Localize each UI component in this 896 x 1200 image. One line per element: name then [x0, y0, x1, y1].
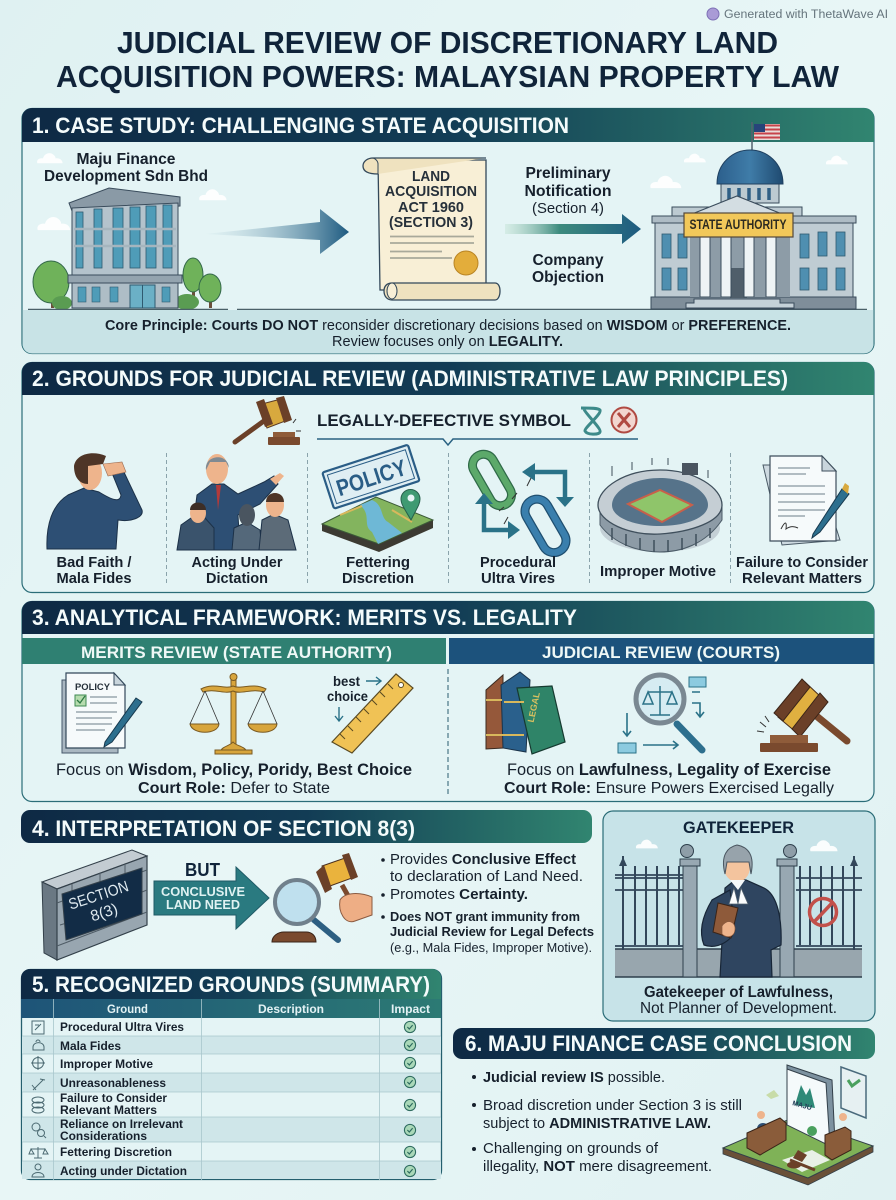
- label: failure to consider: Failure to Consider: [736, 554, 868, 571]
- illustration: judge at the gates: [615, 844, 862, 977]
- label: fettering discretion: Fettering: [346, 554, 410, 571]
- table row shading: [22, 1036, 441, 1179]
- subheader: merits review: [22, 638, 446, 664]
- heading: section 3: [22, 601, 874, 634]
- icon: gavel: [235, 396, 301, 445]
- table ground names: Considerations: [60, 1129, 147, 1143]
- title: [56, 26, 839, 94]
- panel: 2 grounds for judicial review: [22, 362, 874, 592]
- table ground names: Reliance on Irrelevant: [60, 1117, 183, 1131]
- label: fettering discretion: [342, 554, 414, 587]
- ground lines: [28, 308, 867, 310]
- panel: 4 interpretation of section 8(3): [21, 810, 594, 960]
- table header: Impact: [391, 1002, 430, 1016]
- icon: documents and pen: [763, 456, 849, 545]
- subheader: judicial review: [449, 638, 874, 664]
- table ground names: Relevant Matters: [60, 1103, 157, 1117]
- icon: acting under dictation: [177, 454, 296, 550]
- illustration: courtroom and Maju book: MAJU: [791, 1100, 812, 1112]
- legally-defective symbol label: LEGALLY-DEFECTIVE SYMBOL: [317, 411, 571, 430]
- icon: law books: [486, 672, 565, 754]
- arrow: conclusive land need: [154, 867, 269, 929]
- heading: gatekeeper: GATEKEEPER: [683, 818, 794, 837]
- text: judicial focus: [504, 761, 834, 797]
- decorative clouds: [37, 153, 848, 230]
- panel: 5 recognized grounds table: [21, 969, 442, 1180]
- dividers: [166, 453, 730, 585]
- icon: policy stamp and map: [322, 445, 433, 552]
- icon: land acquisition act scroll: (SECTION 3): [389, 214, 473, 231]
- caption: gatekeeper: [640, 984, 837, 1017]
- icon: ruler with best choice: [327, 674, 413, 753]
- icon: law books: LEGAL: [526, 691, 542, 723]
- icon: section 8(3) wall: 8(3): [89, 901, 120, 925]
- title: JUDICIAL REVIEW OF DISCRETIONARY LAND: [117, 26, 778, 60]
- label: procedural ultra vires: Procedural: [480, 554, 556, 571]
- icon: policy document and pen: POLICY: [75, 682, 111, 693]
- subheader: judicial review: JUDICIAL REVIEW (COURTS): [542, 643, 780, 662]
- text: section 8(3) bullets: Judicial Review for Legal Defects: [390, 924, 594, 939]
- label: procedural ultra vires: Ultra Vires: [481, 570, 555, 587]
- text: merits focus: Focus on Wisdom, Policy, Poridy, Best Choice: [56, 761, 412, 779]
- arrow: company to act: [205, 209, 349, 254]
- table ground names: Procedural Ultra Vires: [60, 1020, 184, 1034]
- icon: policy document and pen: [62, 673, 142, 753]
- label: preliminary notification: Notification: [524, 183, 612, 200]
- heading: section 1: 1. CASE STUDY: CHALLENGING STATE ACQUISITION: [32, 113, 569, 138]
- text: section 8(3) bullets: Does NOT grant immunity from: [390, 909, 580, 924]
- label: BUT: BUT: [185, 860, 220, 880]
- arrow: conclusive land need: LAND NEED: [166, 898, 240, 912]
- divider: [447, 669, 449, 795]
- panel: 1 case study: [22, 108, 874, 354]
- text: merits focus: Court Role: Defer to State: [138, 780, 330, 797]
- heading: section 1: [22, 108, 874, 142]
- caption: gatekeeper: Gatekeeper of Lawfulness,: [644, 984, 833, 1001]
- text: conclusion bullets: Broad discretion under Section 3 is still: [483, 1097, 742, 1114]
- text: conclusion bullets: illegality, NOT mere disagreement.: [483, 1158, 712, 1175]
- core principle band: Core Principle: Courts DO NOT reconsider discretionary decisions based on WISDOM or PREFERENCE.: [105, 318, 791, 334]
- icon: ruler with best choice: best: [333, 674, 360, 689]
- heading: section 3: 3. ANALYTICAL FRAMEWORK: MERITS VS. LEGALITY: [32, 605, 577, 630]
- label: failure to consider: Relevant Matters: [742, 570, 862, 587]
- panel: 3 analytical framework: [22, 601, 874, 802]
- label: improper motive: Improper Motive: [600, 563, 716, 580]
- company name: Development Sdn Bhd: [44, 168, 208, 185]
- text: conclusion bullets: Challenging on grounds of: [483, 1140, 659, 1157]
- text: conclusion bullets: subject to ADMINISTRATIVE LAW.: [483, 1115, 711, 1132]
- table ground names: Fettering Discretion: [60, 1145, 172, 1159]
- table ground names: Improper Motive: [60, 1057, 153, 1071]
- table header: Ground: [107, 1002, 148, 1016]
- label: failure to consider: [736, 554, 868, 587]
- core principle band: [22, 310, 874, 354]
- icon: scales: [190, 674, 277, 754]
- icon: policy stamp and map: POLICY: [333, 454, 410, 501]
- table header: [21, 999, 441, 1018]
- label: acting under dictation: Acting Under: [192, 554, 283, 571]
- text: section 8(3) bullets: (e.g., Mala Fides, Improper Motive).: [390, 940, 592, 955]
- watermark: generated with ThetaWave AI: Generated with ThetaWave AI: [724, 9, 888, 21]
- table row icons: [29, 1021, 48, 1177]
- table ground names: Acting under Dictation: [60, 1164, 187, 1178]
- icon: bad faith person: [47, 453, 142, 549]
- table impact checks: [404, 1021, 416, 1177]
- title: ACQUISITION POWERS: MALAYSIAN PROPERTY LAW: [56, 60, 839, 94]
- label: fettering discretion: Discretion: [342, 570, 414, 587]
- label: acting under dictation: Dictation: [206, 570, 268, 587]
- icon: land acquisition act scroll: [363, 158, 500, 300]
- arrow: conclusive land need: CONCLUSIVE: [161, 885, 245, 899]
- icon: state authority building: STATE AUTHORITY: [690, 217, 786, 232]
- icon: stadium: [598, 458, 722, 552]
- label: company objection: Objection: [532, 269, 604, 286]
- text: section 8(3) bullets: Promotes Certainty.: [390, 887, 528, 903]
- heading: section 5: 5. RECOGNIZED GROUNDS (SUMMARY): [32, 972, 430, 997]
- subheader: merits review: MERITS REVIEW (STATE AUTHORITY): [81, 643, 392, 662]
- icon: office building with trees: [33, 188, 221, 310]
- legally-defective symbol label: [317, 408, 638, 445]
- core principle band: Review focuses only on LEGALITY.: [332, 334, 563, 350]
- illustration: courtroom and Maju book: [723, 1065, 873, 1185]
- heading: section 4: [21, 810, 592, 843]
- company name: [44, 151, 208, 185]
- heading: section 6: 6. MAJU FINANCE CASE CONCLUSION: [465, 1031, 852, 1056]
- label: company objection: [532, 252, 604, 286]
- icon: magnifier with scales and flow: [618, 675, 706, 753]
- icon: section 8(3) wall: SECTION: [67, 878, 131, 914]
- text: merits focus: [56, 761, 412, 797]
- caption: gatekeeper: Not Planner of Development.: [640, 1000, 837, 1017]
- text: conclusion bullets: Judicial review IS possible.: [483, 1069, 665, 1086]
- text: section 8(3) bullets: Provides Conclusive Effect: [390, 852, 576, 868]
- icon: land acquisition act scroll: ACT 1960: [398, 199, 464, 216]
- table ground names: Unreasonableness: [60, 1076, 166, 1090]
- icon: clouds: [636, 840, 838, 851]
- icon: magnifier and gavel in hand: [272, 853, 372, 942]
- heading: section 4: 4. INTERPRETATION OF SECTION 8(3): [32, 816, 415, 841]
- heading: section 2: 2. GROUNDS FOR JUDICIAL REVIEW (ADMINISTRATIVE LAW PRINCIPLES): [32, 366, 788, 391]
- label: preliminary notification: [524, 165, 612, 217]
- text: section 8(3) bullets: to declaration of Land Need.: [390, 869, 583, 885]
- text: judicial focus: Court Role: Ensure Powers Exercised Legally: [504, 780, 834, 797]
- label: bad faith: Bad Faith /: [56, 554, 132, 571]
- label: company objection: Company: [532, 252, 604, 269]
- panel: gatekeeper: [603, 811, 875, 1021]
- text: judicial focus: Focus on Lawfulness, Legality of Exercise: [507, 761, 831, 779]
- label: preliminary notification: (Section 4): [532, 200, 604, 217]
- text: section 8(3) bullets: [381, 852, 594, 955]
- icon: broken chain and arrows: [468, 450, 574, 557]
- icon: state authority building: [651, 122, 856, 309]
- label: bad faith: [56, 554, 132, 587]
- table grid lines: [22, 999, 441, 1180]
- label: bad faith: Mala Fides: [56, 570, 132, 587]
- company name: Maju Finance: [76, 151, 176, 168]
- arrow: notification to state: [505, 214, 641, 244]
- icon: ruler with best choice: choice: [327, 689, 368, 704]
- panel: 6 case conclusion: [453, 1028, 875, 1185]
- table ground names: [60, 1020, 187, 1178]
- icon: section 8(3) wall: [42, 850, 147, 960]
- table ground names: Mala Fides: [60, 1039, 121, 1053]
- text: conclusion bullets: [472, 1069, 742, 1175]
- label: acting under dictation: [192, 554, 283, 587]
- icon: gavel: [757, 679, 847, 752]
- label: procedural ultra vires: [480, 554, 556, 587]
- icon: land acquisition act scroll: ACQUISITION: [385, 183, 477, 200]
- label: preliminary notification: Preliminary: [526, 165, 611, 182]
- table ground names: Failure to Consider: [60, 1091, 167, 1105]
- icon: land acquisition act scroll: LAND: [412, 168, 450, 185]
- table header: Description: [258, 1002, 324, 1016]
